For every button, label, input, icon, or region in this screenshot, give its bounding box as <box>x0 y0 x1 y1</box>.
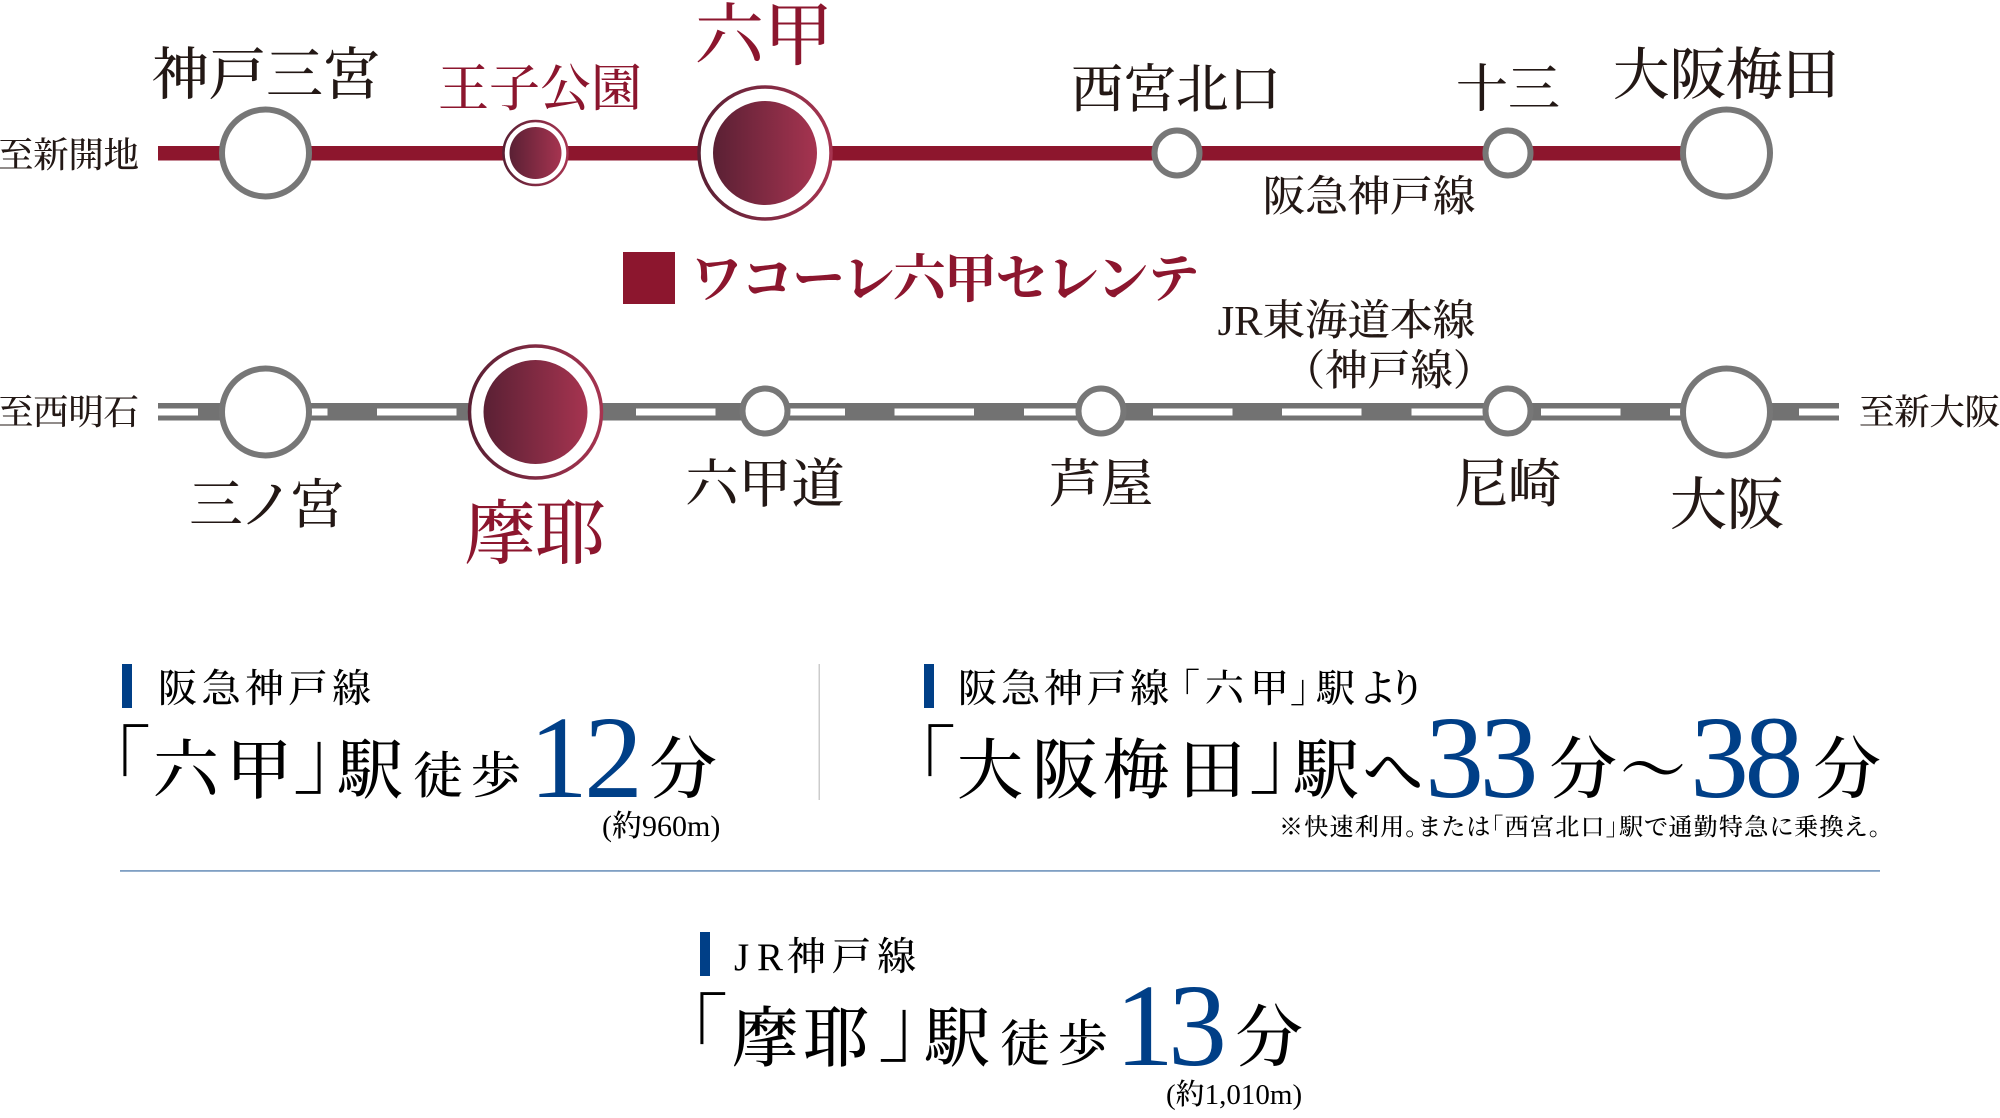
destination text: へ <box>1363 740 1423 806</box>
station circle: Amagasaki <box>1486 388 1530 434</box>
label: Kobe-Sannomiya: 神戸三宮 <box>152 44 380 107</box>
tilde: ～ <box>1620 735 1686 808</box>
walking time text: 摩耶 <box>732 1003 869 1076</box>
label: Kobe line in parentheses: （神戸線） <box>1283 348 1495 395</box>
property name text: ワコーレ六甲セレンテ <box>690 251 1200 309</box>
walking label: 徒歩 <box>1000 1016 1108 1072</box>
label: Amagasaki: 尼崎 <box>1455 456 1561 514</box>
station circle: Sannomiya <box>222 368 309 456</box>
heading: Hankyu Kobe line: 阪急神戸線 <box>158 668 371 711</box>
panel: walk from Maya station <box>648 932 1303 1111</box>
track: striped grey line <box>158 403 1839 420</box>
station circle: Rokkomichi <box>742 388 788 434</box>
walking time text: 駅 <box>335 735 403 808</box>
distance note: (約1,010m) <box>1166 1078 1302 1111</box>
panel: walk from Rokko station <box>71 664 720 843</box>
station marker: Maya <box>470 346 602 478</box>
station circle: Ashiya <box>1078 388 1124 434</box>
station circle: Kobe-Sannomiya <box>222 110 309 196</box>
label: Rokkomichi: 六甲道 <box>686 456 844 514</box>
label: Osaka-Umeda: 大阪梅田 <box>1613 45 1839 107</box>
walking label: 徒歩 <box>413 748 521 804</box>
unit: minutes: 分 <box>1549 732 1617 808</box>
label: to Nishi-Akashi: 至西明石 <box>0 392 139 432</box>
station circle: Nishinomiya-Kitaguchi <box>1154 130 1200 176</box>
number: 12 minutes: 12 <box>529 692 643 823</box>
number: 13 minutes: 13 <box>1115 960 1227 1091</box>
walking time text: 「 <box>71 722 151 810</box>
station circle: Juso <box>1486 130 1530 176</box>
destination text: 「 <box>876 722 956 810</box>
destination text: 駅 <box>1291 735 1359 808</box>
accent bar <box>122 664 132 708</box>
label: Nishinomiya-Kitaguchi: 西宮北口 <box>1071 61 1281 119</box>
track: red line <box>158 146 1726 160</box>
label: Maya: 摩耶 <box>464 496 606 574</box>
number: 38: 38 <box>1690 692 1804 823</box>
accent bar <box>700 932 710 976</box>
station circle: Osaka <box>1683 368 1770 456</box>
route: JR Tokaido line <box>0 298 2000 574</box>
unit: minutes: 分 <box>1235 1000 1303 1076</box>
station marker: Rokko <box>699 87 831 219</box>
accent bar <box>924 664 934 708</box>
distance note: (約960m) <box>602 810 720 843</box>
label: Juso: 十三 <box>1456 62 1560 119</box>
walking time text: 駅 <box>922 1003 990 1076</box>
route: Hankyu Kobe line <box>0 0 1839 221</box>
label: to Shin-Osaka: 至新大阪 <box>1859 392 2000 432</box>
walking time text: 六甲 <box>153 735 292 808</box>
destination text: 大阪梅田 <box>957 735 1245 808</box>
property name: Wacore Rokko Celente <box>623 251 1200 309</box>
label: JR Tokaido main line: JR東海道本線 <box>1218 298 1475 345</box>
footnote: ※快速利用。または「西宮北口」駅で通勤特急に乗換え。 <box>1279 814 1881 841</box>
label: to Shinkaichi: 至新開地 <box>0 135 139 175</box>
label: Rokko: 六甲 <box>695 0 833 74</box>
label: Ashiya: 芦屋 <box>1049 457 1153 514</box>
icon: red square <box>623 252 675 304</box>
walking time text: 」 <box>878 985 958 1073</box>
destination text: 」 <box>1249 717 1329 805</box>
unit: minutes: 分 <box>649 732 717 808</box>
label: Hankyu Kobe line: 阪急神戸線 <box>1263 174 1475 221</box>
divider between panels <box>818 664 820 800</box>
label: Sannomiya: 三ノ宮 <box>189 475 342 535</box>
panel: train time to Osaka-Umeda <box>876 664 1881 841</box>
heading: JR Kobe line: JR神戸線 <box>734 936 916 979</box>
walking time text: 「 <box>648 990 728 1078</box>
walking time text: 」 <box>293 717 373 805</box>
station marker: Oji-Koen <box>504 121 568 185</box>
unit: minutes: 分 <box>1813 732 1881 808</box>
label: Oji-Koen: 王子公園 <box>438 62 642 118</box>
heading: from Rokko station: 阪急神戸線「六甲」駅より <box>958 668 1426 711</box>
label: Osaka: 大阪 <box>1670 474 1784 537</box>
horizontal divider <box>120 870 1880 872</box>
station circle: Osaka-Umeda <box>1683 110 1770 196</box>
number: 33: 33 <box>1425 692 1538 823</box>
